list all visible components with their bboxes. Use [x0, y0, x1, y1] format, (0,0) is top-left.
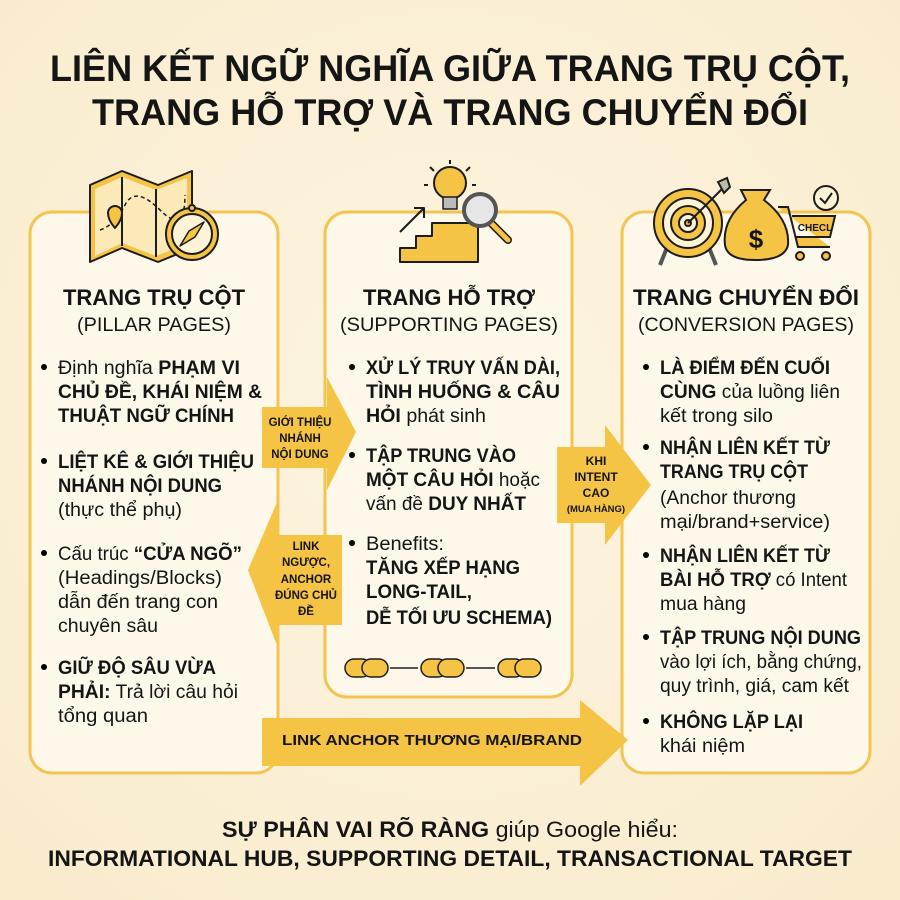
arrow: link ngược: ĐỀ	[298, 605, 314, 618]
bullets: conversion: NHẬN LIÊN KẾT TỪ	[660, 437, 830, 459]
icon: target bag cart: CHECL	[798, 223, 832, 234]
icon: stairs bulb magnifier	[400, 160, 508, 262]
bullets: conversion: (Anchor thương	[660, 488, 796, 509]
bullets: conversion: mại/brand+service)	[660, 512, 830, 533]
arrow: khi intent cao: KHI	[586, 454, 606, 468]
arrow: giới thiệu nhánh nội dung	[262, 377, 356, 490]
arrow: link ngược: ANCHOR	[281, 574, 332, 586]
bullets: supporting: TĂNG XẾP HẠNG	[366, 557, 520, 579]
bullets: pillar: THUẬT NGỮ CHÍNH	[58, 405, 234, 427]
icon: map and compass	[90, 171, 218, 262]
bullets: supporting: DỄ TỐI ƯU SCHEMA)	[366, 607, 552, 629]
bullets: supporting	[349, 357, 560, 629]
bullets: supporting: TÌNH HUỐNG & CÂU	[366, 381, 560, 403]
heading: supporting: TRANG HỖ TRỢ	[363, 284, 535, 310]
footer text: INFORMATIONAL HUB, SUPPORTING DETAIL, TRANSACTIONAL TARGET	[48, 846, 853, 871]
arrow: khi intent cao: INTENT	[574, 470, 618, 484]
arrow: giới thiệu nhánh nội dung: GIỚI THIỆU	[269, 416, 331, 429]
bullets: pillar: Định nghĩa PHẠM VI	[58, 358, 240, 379]
bullets: conversion	[643, 357, 862, 757]
arrow: link ngược: NGƯỢC,	[282, 557, 330, 569]
bullets: conversion: TẬP TRUNG NỘI DUNG	[660, 627, 861, 649]
icon: target bag cart: $	[749, 224, 764, 254]
bullets: supporting: Benefits:	[366, 534, 444, 555]
arrow: khi intent cao	[557, 425, 651, 545]
arrow: link ngược: ĐÚNG CHỦ	[275, 589, 337, 602]
bullets: supporting: TẬP TRUNG VÀO	[366, 445, 516, 467]
arrow: link ngược: LINK	[293, 541, 320, 553]
icon: chain links	[345, 659, 541, 677]
heading: conversion: TRANG CHUYỂN ĐỔI	[633, 285, 859, 310]
bullets: conversion: KHÔNG LẶP LẠI	[660, 711, 803, 733]
bullets: pillar: NHÁNH NỘI DUNG	[58, 475, 222, 497]
bullets: conversion: CÙNG của luồng liên	[660, 381, 840, 403]
bullets: pillar: PHẢI: Trả lời câu hỏi	[58, 681, 238, 703]
arrow: khi intent cao: (MUA HÀNG)	[567, 504, 625, 515]
bullets: pillar: CHỦ ĐỀ, KHÁI NIỆM &	[58, 381, 262, 403]
bullets: pillar: GIỮ ĐỘ SÂU VỪA	[58, 657, 216, 679]
title: TRANG HỖ TRỢ VÀ TRANG CHUYỂN ĐỔI	[92, 90, 808, 133]
arrow: khi intent cao: CAO	[583, 486, 609, 500]
bullets: pillar: Cấu trúc “CỬA NGÕ”	[58, 543, 242, 565]
panel: supporting pages	[325, 160, 572, 697]
bullets: pillar: (thực thể phụ)	[58, 500, 182, 521]
arrow: link anchor thương mại/brand	[262, 700, 628, 786]
bullets: supporting: XỬ LÝ TRUY VẤN DÀI,	[366, 357, 560, 379]
bullets: pillar: tổng quan	[58, 706, 148, 727]
bullets: conversion: kết trong silo	[660, 406, 773, 427]
arrow: giới thiệu nhánh nội dung: NỘI DUNG	[271, 448, 329, 461]
panel: conversion pages: (CONVERSION PAGES)	[638, 315, 854, 336]
panel: supporting pages: (SUPPORTING PAGES)	[340, 315, 558, 336]
bullets: supporting: LONG-TAIL,	[366, 582, 472, 603]
bullets: supporting: HỎI phát sinh	[366, 405, 486, 427]
heading: pillar: TRANG TRỤ CỘT	[63, 285, 246, 310]
bullets: pillar	[41, 358, 262, 727]
title: LIÊN KẾT NGỮ NGHĨA GIỮA TRANG TRỤ CỘT,	[50, 47, 850, 89]
bullets: supporting: vấn đề DUY NHẤT	[366, 493, 526, 515]
bullets: supporting: MỘT CÂU HỎI hoặc	[366, 469, 540, 491]
arrow: giới thiệu nhánh nội dung: NHÁNH	[279, 432, 321, 445]
bullets: pillar: LIỆT KÊ & GIỚI THIỆU	[58, 451, 254, 473]
bullets: pillar: chuyên sâu	[58, 616, 158, 637]
panel: pillar pages: (PILLAR PAGES)	[77, 315, 231, 336]
bullets: conversion: NHẬN LIÊN KẾT TỪ	[660, 545, 830, 567]
bullets: conversion: khái niệm	[660, 736, 745, 757]
panel: pillar pages	[30, 171, 278, 773]
title	[50, 47, 850, 133]
arrow: link anchor thương mại/brand: LINK ANCHOR THƯƠNG MẠI/BRAND	[282, 732, 582, 749]
footer text: SỰ PHÂN VAI RÕ RÀNG giúp Google hiểu:	[222, 817, 678, 842]
footer text	[48, 817, 853, 871]
bullets: conversion: mua hàng	[660, 594, 746, 615]
bullets: conversion: quy trình, giá, cam kết	[660, 676, 850, 697]
bullets: conversion: TRANG TRỤ CỘT	[660, 461, 808, 483]
bullets: conversion: vào lợi ích, bằng chứng,	[660, 651, 862, 673]
bullets: conversion: BÀI HỖ TRỢ có Intent	[660, 569, 848, 591]
arrow: link ngược	[248, 500, 342, 648]
bullets: pillar: dẫn đến trang con	[58, 591, 218, 613]
bullets: conversion: LÀ ĐIỂM ĐẾN CUỐI	[660, 357, 830, 379]
icon: target bag cart	[654, 178, 838, 265]
bullets: pillar: (Headings/Blocks)	[58, 568, 222, 589]
panel: conversion pages	[622, 178, 870, 773]
